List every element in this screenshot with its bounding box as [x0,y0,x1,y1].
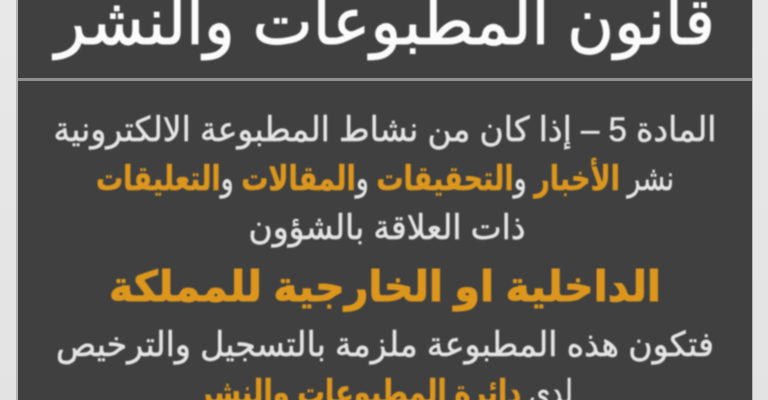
text block: article 5 first line: المادة 5 – إذا كان من نشاط المطبوعة الالكترونية [53,111,716,150]
text block: related affairs line: ذات العلاقة بالشؤون [248,209,526,248]
text block: highlighted content types: نشر الأخبار والتحقيقات والمقالات والتعليقات [96,157,674,199]
highlighted heading: domestic or foreign: الداخلية او الخارجية للمملكة [109,263,661,312]
text block: registration and licensing requirement: فتكون هذه المطبوعة ملزمة بالتسجيل والترخيص [56,326,714,365]
